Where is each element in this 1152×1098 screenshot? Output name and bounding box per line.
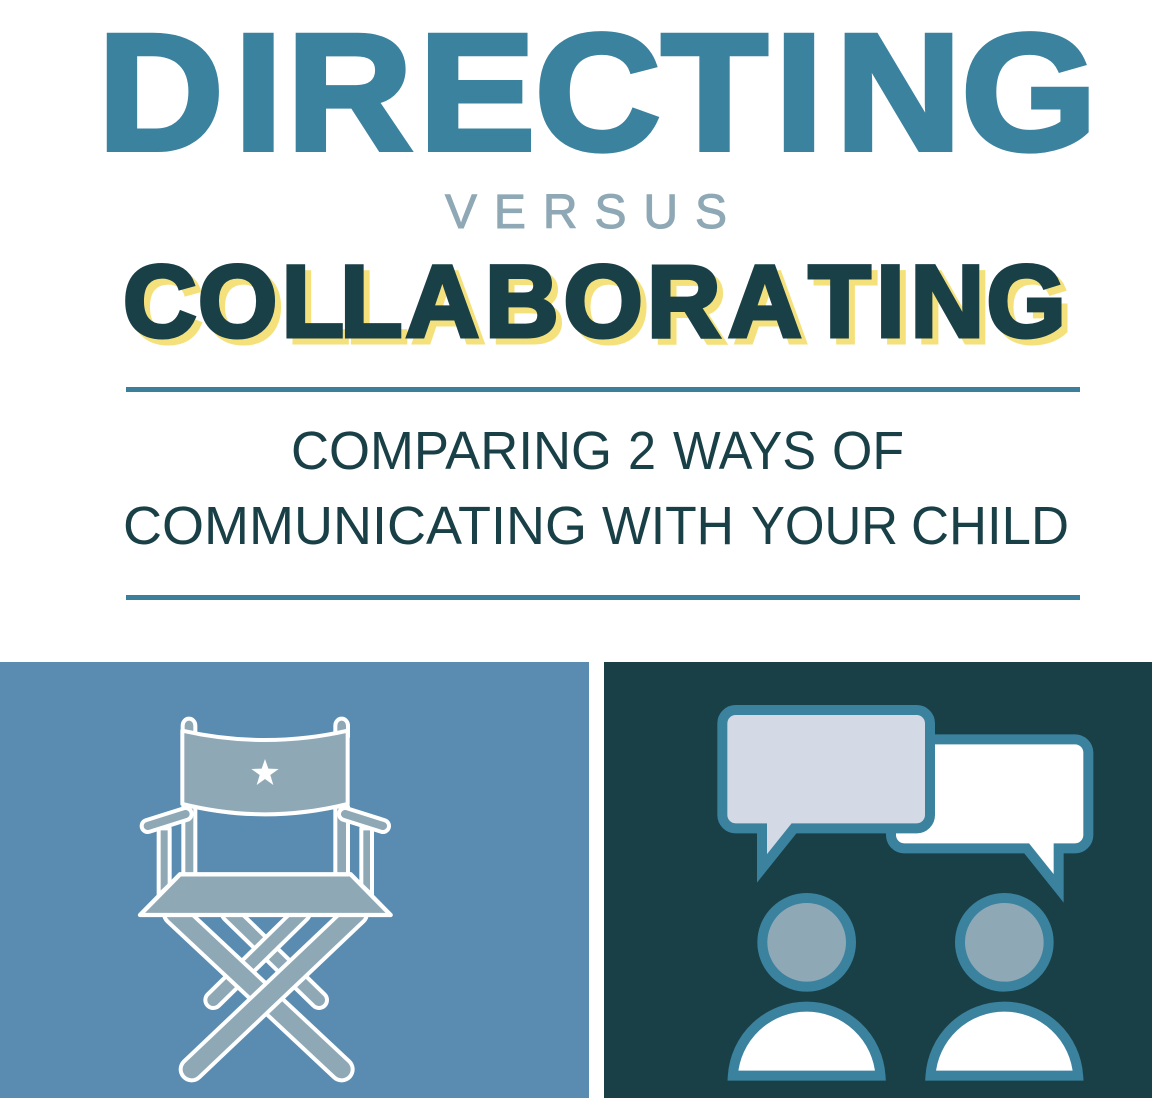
left armrest xyxy=(148,814,186,826)
person: left xyxy=(733,898,880,1076)
icon: director's chair xyxy=(140,719,391,1069)
heading line 1: WAYS xyxy=(673,421,816,481)
star xyxy=(251,759,279,785)
heading line 2: YOUR xyxy=(751,496,898,556)
chair back xyxy=(182,731,348,814)
right armrest xyxy=(345,814,383,826)
arm posts xyxy=(159,807,372,895)
title: collaborating: COLLABORATING xyxy=(123,244,1066,358)
person: right xyxy=(930,898,1078,1076)
panel: directing xyxy=(0,662,589,1098)
speech bubble: left xyxy=(722,710,930,868)
heading line 2: CHILD xyxy=(911,496,1069,556)
subtitle: versus: VERSUS xyxy=(445,186,727,239)
front legs xyxy=(175,913,356,1069)
title: directing: DIRECTING xyxy=(98,0,1097,186)
back post tabs xyxy=(183,719,348,737)
rear legs xyxy=(213,913,319,1000)
title: collaborating: COLLABORATING xyxy=(129,250,1072,364)
icon: two people talking xyxy=(722,710,1088,1076)
seat xyxy=(140,874,391,915)
panel: collaborating xyxy=(604,662,1152,1098)
heading line 1: COMPARING xyxy=(291,421,612,481)
heading line 1: OF xyxy=(832,421,904,481)
heading line 2: WITH xyxy=(602,496,734,556)
heading line 2: COMMUNICATING xyxy=(123,496,587,556)
speech bubble: right xyxy=(891,739,1088,888)
heading line 1: 2 xyxy=(628,421,656,481)
